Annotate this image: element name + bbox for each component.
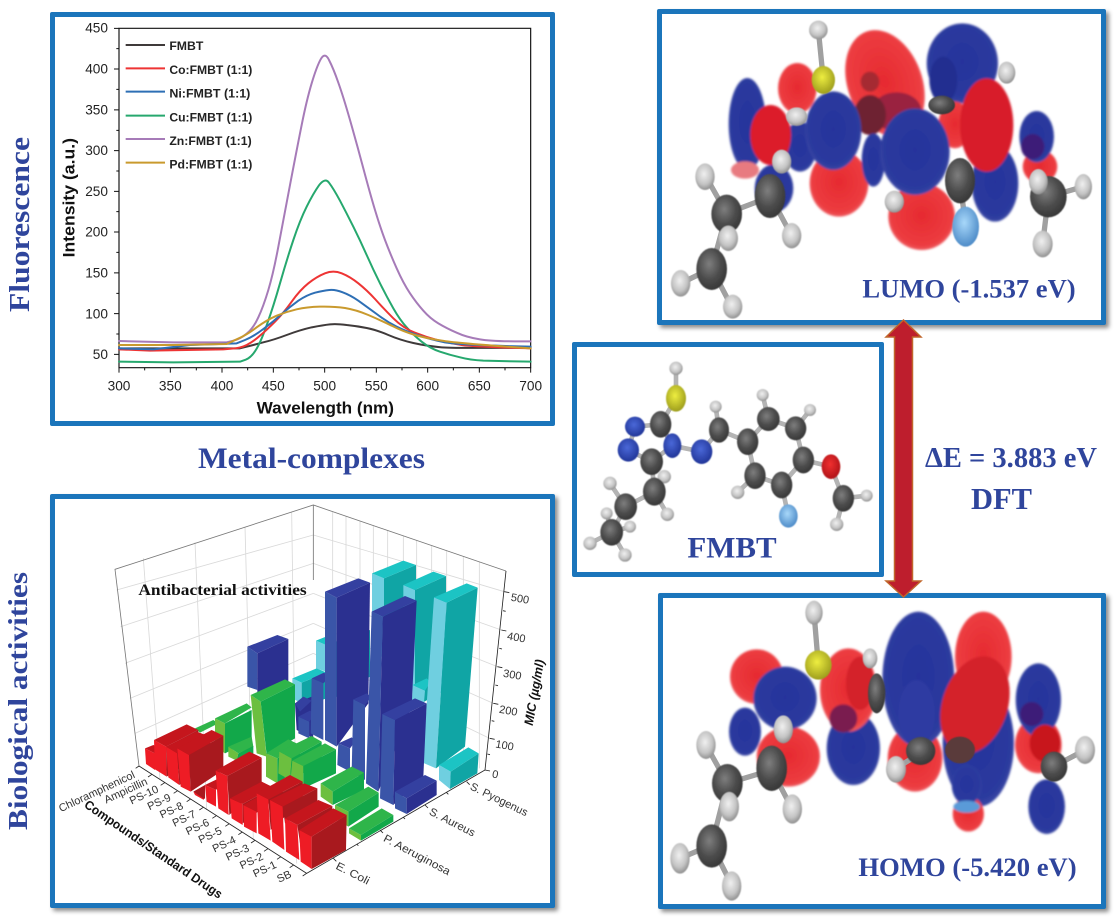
compound axis labels: SB bbox=[275, 869, 294, 886]
bacteria axis labels: P. Aeruginosa bbox=[381, 833, 453, 879]
y axis labels: 150 bbox=[85, 265, 108, 280]
compound axis labels: PS-10 bbox=[128, 784, 161, 807]
bacteria axis labels: S. Pyogenus bbox=[468, 781, 530, 819]
MIC axis labels: 0 bbox=[491, 768, 499, 781]
bonds bbox=[680, 613, 1085, 885]
MIC axis labels bbox=[491, 592, 530, 781]
compound axis labels: PS-8 bbox=[158, 800, 185, 821]
3D gridlines bbox=[117, 512, 504, 863]
compound axis labels bbox=[57, 769, 294, 886]
x axis labels: 350 bbox=[159, 378, 182, 393]
y axis labels: 50 bbox=[93, 347, 108, 362]
axes frame bbox=[119, 28, 531, 368]
bonds bbox=[590, 368, 867, 555]
x axis labels: 550 bbox=[365, 378, 388, 393]
y axis labels: 400 bbox=[85, 62, 108, 77]
x axis title: Wavelength (nm) bbox=[257, 399, 394, 418]
x axis labels bbox=[108, 378, 542, 393]
y axis labels: 450 bbox=[85, 21, 108, 36]
panel: LUMO orbital bbox=[657, 9, 1106, 325]
curve: Cu:FMBT bbox=[119, 181, 531, 362]
MIC axis title: MIC (µg/ml) bbox=[522, 658, 547, 727]
x axis labels: 300 bbox=[108, 378, 131, 393]
MIC axis labels: 400 bbox=[506, 630, 526, 645]
legend: Zn:FMBT (1:1) bbox=[169, 134, 252, 148]
axis ticks bbox=[114, 28, 531, 373]
bars: S. Pyogenus bbox=[292, 561, 479, 789]
bonds bbox=[681, 30, 1083, 307]
compound axis labels: PS-2 bbox=[238, 851, 265, 872]
3D box axes bbox=[115, 505, 506, 766]
legend: Ni:FMBT (1:1) bbox=[169, 87, 250, 101]
curve: Zn:FMBT bbox=[119, 56, 531, 342]
HOMO label: HOMO (-5.420 eV) bbox=[858, 852, 1077, 882]
heading: Fluorescence: Fluorescence bbox=[5, 137, 36, 312]
MIC axis labels: 300 bbox=[502, 668, 522, 683]
y axis title: Intensity (a.u.) bbox=[60, 138, 79, 257]
y axis labels: 100 bbox=[85, 306, 108, 321]
legend bbox=[126, 39, 252, 171]
compound axis labels: PS-9 bbox=[146, 792, 173, 813]
bars: E. Coli bbox=[145, 724, 347, 869]
x axis labels: 700 bbox=[519, 378, 542, 393]
curve: FMBT bbox=[119, 324, 531, 348]
y axis labels bbox=[85, 21, 108, 362]
heading: Biological activities: Biological activities bbox=[3, 572, 33, 830]
x axis labels: 650 bbox=[468, 378, 491, 393]
compound axis labels: PS-7 bbox=[171, 809, 198, 830]
x axis labels: 400 bbox=[211, 378, 234, 393]
chart caption: Antibacterial activities bbox=[138, 582, 307, 599]
bars: P. Aeruginosa bbox=[195, 679, 393, 841]
curves bbox=[119, 56, 531, 362]
compound axis labels: PS-1 bbox=[251, 859, 279, 880]
x axis labels: 600 bbox=[416, 378, 439, 393]
x axis labels: 450 bbox=[262, 378, 285, 393]
orbital lobes bbox=[729, 19, 1057, 250]
legend: Co:FMBT (1:1) bbox=[169, 63, 252, 77]
compound axis labels: PS-4 bbox=[211, 834, 238, 855]
legend: FMBT bbox=[169, 39, 204, 53]
panel: fluorescence chart bbox=[50, 12, 555, 426]
floor and MIC axes bbox=[136, 571, 509, 876]
compound axis labels: PS-3 bbox=[224, 843, 251, 864]
panel: FMBT molecule bbox=[572, 342, 884, 577]
atoms bbox=[671, 21, 1092, 319]
bacteria axis labels: S. Aureus bbox=[427, 806, 477, 840]
orbital lobes bbox=[729, 612, 1065, 834]
energy gap text bbox=[925, 442, 1097, 516]
FMBT label: FMBT bbox=[687, 532, 777, 565]
heading: Metal-complexes: Metal-complexes bbox=[198, 442, 425, 475]
curve: Ni:FMBT bbox=[119, 290, 531, 349]
LUMO label: LUMO (-1.537 eV) bbox=[862, 274, 1076, 304]
compound axis title: Compounds/Standard Drugs bbox=[82, 798, 225, 902]
compound axis labels: PS-6 bbox=[184, 817, 211, 838]
bars: S. Aureus bbox=[247, 578, 437, 814]
y axis labels: 300 bbox=[85, 143, 108, 158]
MIC axis labels: 200 bbox=[498, 704, 518, 719]
compound axis labels: PS-5 bbox=[197, 825, 224, 846]
MIC axis labels: 100 bbox=[494, 738, 515, 753]
compound axis labels: Chloramphenicol bbox=[57, 769, 137, 815]
y axis labels: 250 bbox=[85, 184, 108, 199]
energy gap text: ΔE = 3.883 eV bbox=[925, 442, 1097, 474]
bacteria axis labels bbox=[334, 781, 530, 888]
bacteria axis labels: E. Coli bbox=[334, 860, 371, 888]
MIC axis labels: 500 bbox=[510, 592, 530, 607]
y axis labels: 350 bbox=[85, 102, 108, 117]
curve: Pd:FMBT bbox=[119, 307, 531, 348]
atoms bbox=[670, 601, 1095, 901]
atoms bbox=[583, 362, 873, 562]
x axis labels: 500 bbox=[313, 378, 336, 393]
panel: antibacterial 3D bar chart bbox=[50, 494, 555, 908]
panel: HOMO orbital bbox=[658, 593, 1106, 909]
legend: Pd:FMBT (1:1) bbox=[169, 157, 252, 171]
y axis labels: 200 bbox=[85, 225, 108, 240]
arrow: energy gap double arrow bbox=[884, 319, 923, 598]
legend: Cu:FMBT (1:1) bbox=[169, 110, 252, 124]
compound axis labels: Ampicillin bbox=[102, 776, 150, 806]
energy gap text: DFT bbox=[971, 481, 1032, 516]
curve: Co:FMBT bbox=[119, 272, 531, 351]
